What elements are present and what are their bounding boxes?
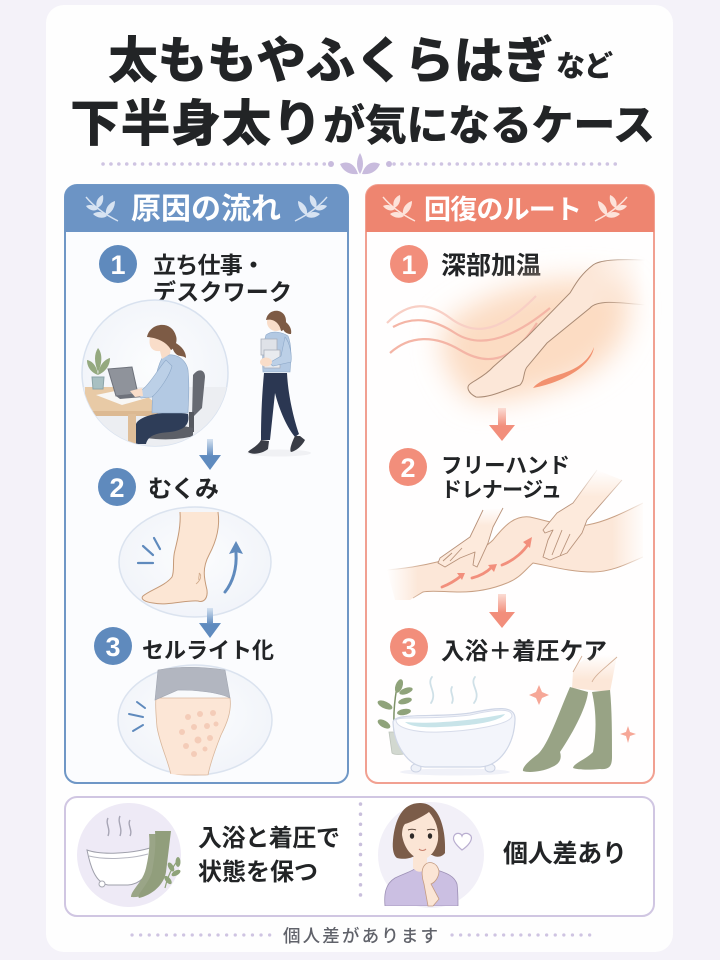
- illustration: thigh with cellulite: [118, 665, 272, 775]
- step 1 heading: deep warming: 1: [401, 250, 417, 280]
- summary text: individual differences: 個人差あり: [503, 840, 627, 868]
- title: 下半身太り: [70, 96, 322, 152]
- illustration: compression socks and sparkles: [523, 655, 636, 772]
- step 1 heading: standing and desk work: [99, 245, 292, 305]
- panel: recovery route: [366, 185, 654, 783]
- footer note: 個人差があります: [283, 926, 438, 946]
- summary illustration: bath and socks: [77, 803, 182, 907]
- title: [70, 33, 655, 152]
- illustration: desk worker in circle: [82, 300, 232, 447]
- arrow: recovery step 2 to 3: [489, 594, 515, 628]
- arrow: recovery step 1 to 2: [489, 408, 515, 441]
- summary panel: [65, 797, 654, 916]
- step 1 heading: standing and desk work: 立ち仕事・: [153, 252, 265, 278]
- step 1 heading: standing and desk work: デスクワーク: [153, 279, 292, 305]
- step 3 heading: cellulite: [94, 627, 274, 665]
- step 2 heading: freehand drainage: [389, 448, 570, 502]
- illustration: bathtub with plant and steam: [376, 677, 515, 776]
- dotted divider in summary panel: [359, 804, 362, 904]
- summary text: keep condition with bath and compression: 状態を保つ: [198, 859, 318, 886]
- step 1 heading: deep warming: [390, 245, 541, 283]
- illustration: swollen foot: [119, 507, 271, 617]
- summary illustration: thoughtful woman with heart: [378, 802, 484, 908]
- title: など: [556, 50, 613, 83]
- summary text: keep condition with bath and compression: 入浴と着圧で: [198, 825, 340, 852]
- panel: causes: [65, 185, 348, 783]
- step 3 heading: bath and compression care: [390, 628, 607, 666]
- panel header: causes: [65, 185, 348, 232]
- step 2 heading: freehand drainage: フリーハンド: [441, 454, 570, 478]
- title: 太ももやふくらはぎ: [108, 33, 553, 89]
- panel header: recovery: [366, 185, 654, 232]
- step 2 heading: swelling: [98, 468, 219, 506]
- panel header: recovery: 回復のルート: [424, 195, 582, 225]
- step 3 heading: cellulite: 3: [105, 632, 121, 662]
- step 3 heading: bath and compression care: 3: [401, 633, 417, 663]
- step 3 heading: bath and compression care: 入浴＋着圧ケア: [441, 638, 607, 664]
- title ornament divider: [103, 153, 618, 174]
- step 3 heading: cellulite: セルライト化: [142, 638, 274, 663]
- title: が気になるケース: [323, 102, 655, 149]
- illustration: walking woman with documents: [247, 311, 311, 456]
- panel header: causes: 原因の流れ: [131, 193, 281, 226]
- arrow: step 1 to step 2: [199, 439, 221, 470]
- step 2 heading: swelling: むくみ: [148, 476, 219, 503]
- step 2 heading: freehand drainage: 2: [400, 453, 416, 483]
- step 1 heading: deep warming: 深部加温: [441, 252, 541, 280]
- illustration: massage hands with arrows: [387, 470, 643, 600]
- step 1 heading: standing and desk work: 1: [110, 250, 126, 280]
- summary text: keep condition with bath and compression: [198, 825, 340, 886]
- illustration: warming leg with heat waves: [387, 260, 645, 402]
- step 2 heading: freehand drainage: ドレナージュ: [441, 479, 562, 502]
- step 2 heading: swelling: 2: [109, 473, 125, 503]
- arrow: step 2 to step 3: [199, 608, 221, 638]
